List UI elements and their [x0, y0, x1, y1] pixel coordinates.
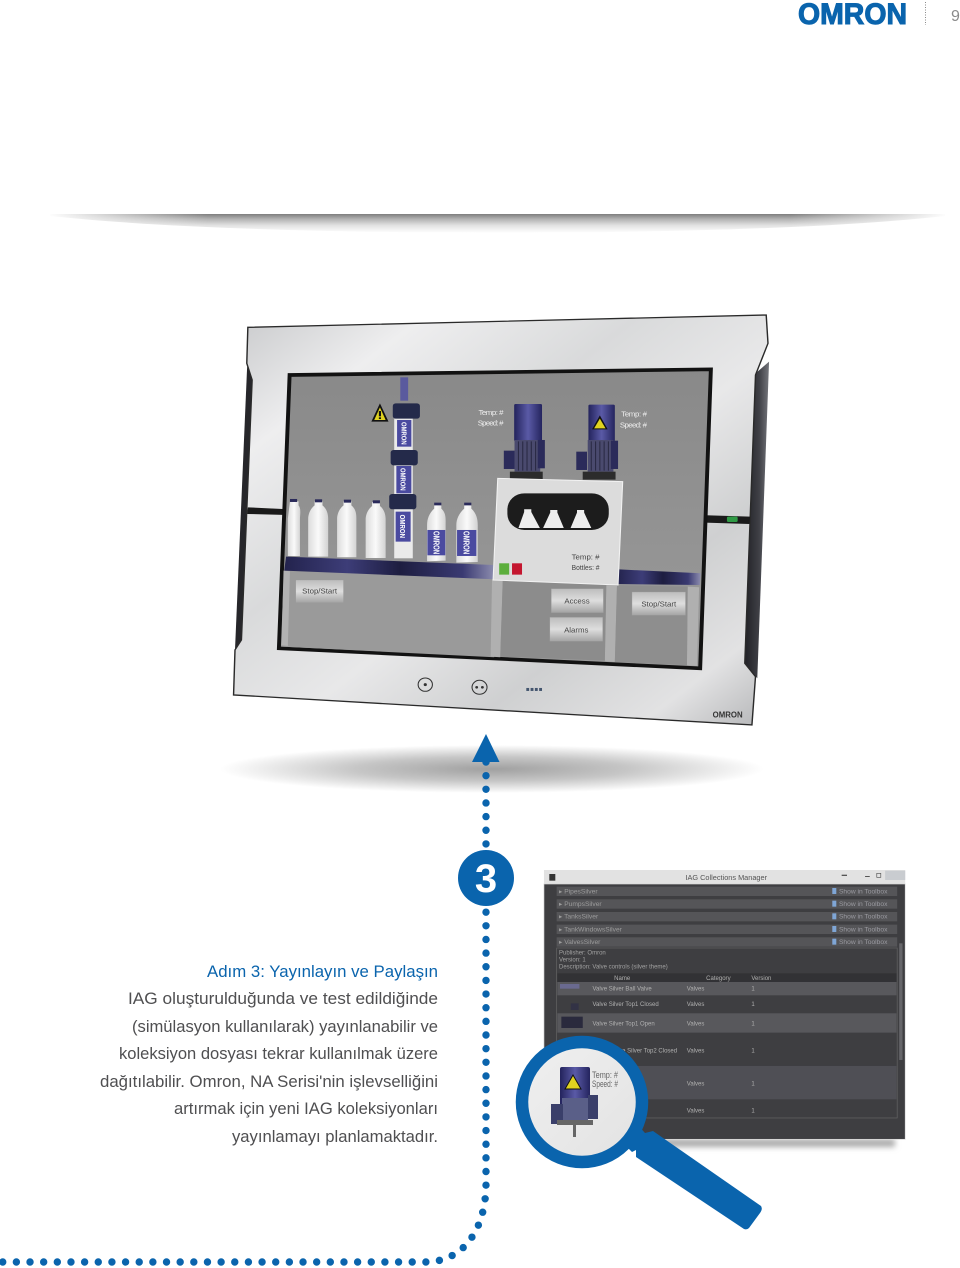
title bar	[544, 870, 905, 885]
title bar: IAG Collections Manager	[685, 873, 768, 882]
valve table: 1	[751, 1021, 755, 1027]
conveyor belts	[284, 557, 701, 585]
pump readouts: Speed: #	[478, 419, 504, 427]
machine readout: Bottles: #	[572, 563, 600, 572]
filling column: OMRON	[399, 422, 407, 445]
status lamps	[499, 563, 522, 575]
button: Stop/Start left	[296, 580, 344, 603]
valve table: Valves	[687, 1021, 704, 1027]
step body: koleksiyon dosyası tekrar kullanılmak üzere	[119, 1044, 438, 1063]
step body	[100, 989, 438, 1146]
bezel indicator	[526, 688, 542, 691]
collection details: Version: 1	[559, 957, 586, 963]
labelled bottles	[427, 505, 478, 563]
button: Alarms: Alarms	[564, 626, 589, 634]
labelled bottles: OMRON	[461, 531, 471, 554]
step body: dağıtılabilir. Omron, NA Serisi'nin işlevselliğini	[100, 1072, 438, 1091]
pump readouts: Temp: #	[621, 410, 648, 419]
valve table: Version	[751, 976, 771, 982]
collection rows: Show in Toolbox	[839, 901, 888, 908]
collection rows: ▸ TanksSilver	[559, 914, 599, 921]
collection rows	[557, 887, 897, 947]
step badge: 3	[475, 857, 497, 901]
window scrollbar	[899, 943, 903, 1060]
valve table: Name	[614, 976, 631, 982]
panel dark side	[744, 362, 769, 678]
valve table: 1	[751, 1082, 755, 1088]
lens	[522, 1042, 642, 1162]
HMI panel	[234, 315, 769, 725]
collection rows: ▸ ValvesSilver	[559, 939, 601, 946]
button: Stop/Start right	[632, 592, 686, 615]
left bezel slot	[247, 507, 288, 515]
button: Stop/Start left: Stop/Start	[302, 587, 338, 596]
step body: yayınlamayı planlamaktadır.	[232, 1127, 438, 1146]
valve table: 1	[751, 1108, 755, 1114]
machine window	[507, 493, 609, 530]
window body	[544, 884, 905, 1139]
labelled bottles: OMRON	[431, 531, 441, 554]
valve table: Category	[706, 976, 731, 982]
arrow head	[472, 734, 500, 762]
button: Access: Access	[564, 597, 590, 605]
valve table: Valves	[687, 1108, 704, 1114]
step heading: Adım 3: Yayınlayın ve Paylaşın	[207, 962, 438, 981]
pump 2	[576, 405, 618, 480]
top shadow band	[48, 213, 948, 234]
dotted connector	[0, 762, 486, 1262]
machine readout: Temp: #	[572, 553, 600, 561]
handle	[622, 1125, 762, 1229]
lens readout: Temp: #	[592, 1070, 618, 1080]
button: Stop/Start right: Stop/Start	[641, 600, 677, 609]
pump readouts: Speed: #	[620, 421, 648, 429]
collection rows: Show in Toolbox	[839, 914, 888, 921]
valve table: Valve Silver Ball Valve	[592, 987, 652, 993]
page number: 9	[951, 8, 960, 25]
button: Access	[551, 589, 603, 613]
collection rows: Show in Toolbox	[839, 939, 888, 946]
IAG Collections Manager window	[544, 870, 905, 1139]
pump readouts: Temp: #	[478, 408, 504, 417]
collection rows: Show in Toolbox	[839, 888, 888, 895]
button: Alarms	[550, 617, 603, 641]
funnels	[518, 509, 591, 528]
pump readouts	[478, 408, 648, 429]
step body: artırmak için yeni IAG koleksiyonları	[174, 1099, 438, 1118]
valve table: Valves	[687, 1048, 704, 1054]
valve table: 1	[751, 1002, 755, 1008]
silver bezel	[234, 315, 768, 725]
step body: (simülasyon kullanılarak) yayınlanabilir ve	[132, 1017, 438, 1036]
lens rim	[522, 1042, 642, 1162]
filling column: OMRON	[399, 468, 406, 491]
pump 1	[504, 404, 545, 479]
machine readout	[572, 553, 600, 572]
collection details	[557, 948, 897, 1118]
warning icon: column	[371, 403, 389, 422]
valve table: 1	[751, 987, 755, 993]
lens pump	[551, 1067, 598, 1137]
step badge	[458, 850, 514, 906]
collection details: Description: Valve controls (silver theme)	[559, 964, 668, 970]
bottle caps	[290, 499, 471, 506]
valve table: Valve Silver Top2 Closed	[611, 1048, 677, 1054]
collection rows: ▸ PumpsSilver	[559, 901, 602, 908]
filling column: OMRON	[398, 515, 405, 538]
header divider	[924, 2, 926, 25]
valve table	[557, 973, 897, 1114]
collection rows: ▸ PipesSilver	[559, 888, 598, 895]
bezel logo: OMRON	[713, 710, 743, 719]
valve table: Valves	[687, 987, 704, 993]
valve table: Valves	[687, 1082, 704, 1088]
valve table: Valve Silver Top1 Closed	[592, 1002, 659, 1008]
plain bottles	[288, 501, 386, 558]
filling machine	[493, 478, 623, 585]
right bezel slot with LED	[705, 515, 750, 524]
panel left edge	[235, 367, 253, 650]
valve table: Valve Silver Top1 Open	[592, 1021, 655, 1027]
lens readout: Speed: #	[592, 1079, 618, 1089]
lower machine frame	[281, 571, 699, 666]
magnifying glass	[522, 1042, 762, 1229]
filling column	[389, 377, 420, 558]
collection rows: ▸ TankWindowsSilver	[559, 926, 623, 933]
screen	[279, 369, 711, 668]
step text	[100, 962, 438, 1146]
window drop shadow	[650, 1139, 895, 1147]
valve table: 1	[751, 1048, 755, 1054]
lens readout	[592, 1070, 618, 1089]
collection rows: Show in Toolbox	[839, 926, 888, 933]
valve table: Valves	[687, 1002, 704, 1008]
floor shadow under HMI	[220, 745, 764, 793]
step body: IAG oluşturulduğunda ve test edildiğinde	[128, 989, 438, 1008]
bezel touch icons	[418, 678, 487, 694]
collection details: Publisher: Omron	[559, 950, 606, 956]
